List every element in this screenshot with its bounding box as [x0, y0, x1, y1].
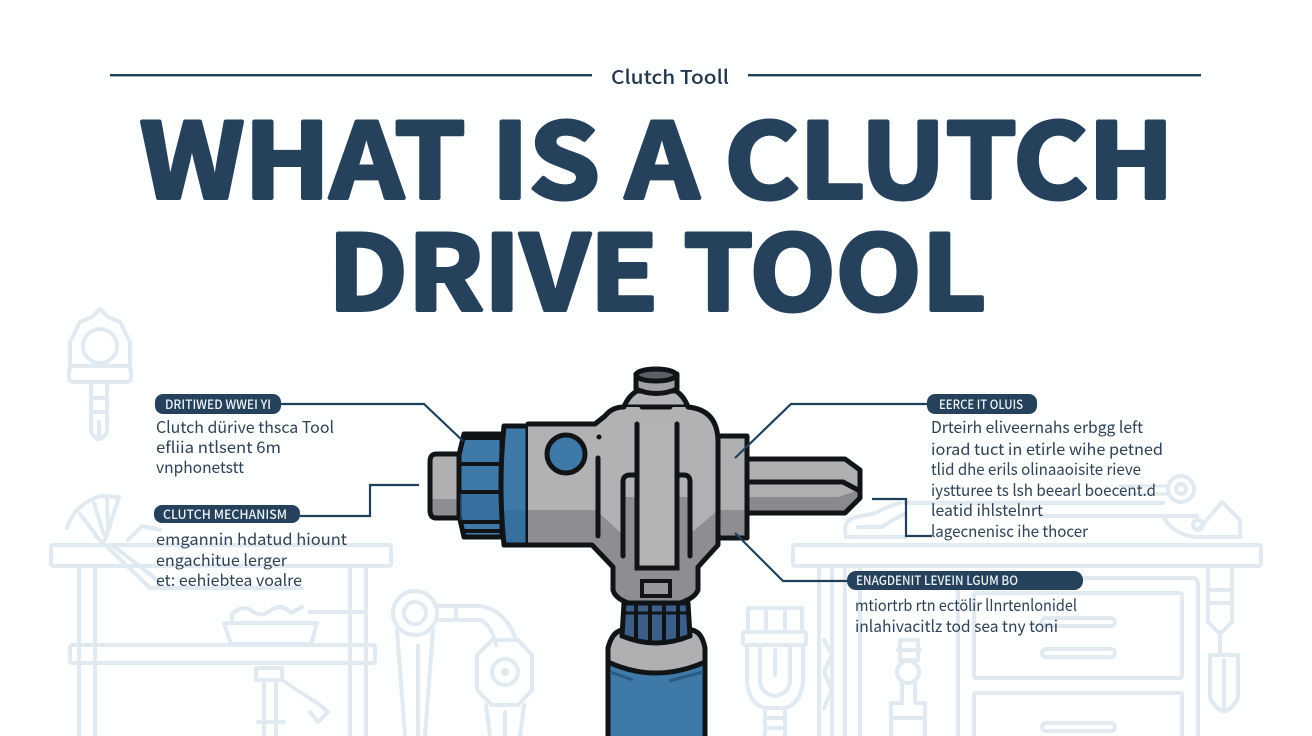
right block	[718, 436, 747, 538]
body housing	[528, 407, 718, 603]
lower ribbed collar	[622, 603, 690, 644]
leader line	[735, 404, 927, 458]
description: tlid dhe erils olinaaoisite rieve	[931, 456, 1141, 480]
output shaft	[747, 459, 860, 513]
icon: background wrench and pipe	[393, 591, 532, 736]
handle	[608, 630, 705, 736]
pill label: CLUTCH MECHANISM	[163, 504, 287, 523]
description: Drteirh eliveernahs erbgg left	[931, 414, 1143, 438]
description: inlahivacitlz tod sea tny toni	[855, 613, 1058, 637]
description	[156, 526, 347, 591]
icon: background desktop tool and gear	[845, 476, 1240, 537]
title: WHAT IS A CLUTCH	[140, 79, 1174, 228]
top nub	[624, 369, 688, 407]
clutch collar	[459, 434, 502, 537]
description: emgannin hdatud hiount	[156, 526, 347, 550]
title: DRIVE TOOL	[328, 191, 986, 340]
callout: top right	[735, 394, 1163, 542]
icon: background chuck tool	[69, 309, 131, 439]
second leader line	[872, 499, 932, 536]
description: vnphonetstt	[156, 454, 244, 478]
leader line	[281, 404, 463, 441]
description: et: eehiebtea voalre	[156, 567, 302, 591]
description	[855, 592, 1077, 637]
description: iystturee ts lsh beearl boecent.d	[931, 477, 1156, 501]
callout: engagement lever	[735, 533, 1083, 637]
pill label	[847, 570, 1083, 590]
pill label: ENAGDENIT LEVEIN LGUM BO	[856, 570, 1018, 589]
icon: background right desk and cabinet	[793, 545, 1261, 736]
description: efliia ntlsent 6m	[156, 434, 281, 458]
description: leatid ihlstelnrt	[931, 497, 1043, 521]
leader line	[735, 533, 847, 581]
callout: driver top left	[155, 394, 463, 478]
blue band	[501, 426, 528, 545]
callout: clutch mechanism	[154, 485, 419, 591]
pill label: EERCE IT OLUIS	[939, 394, 1023, 413]
header label: Clutch Tooll	[611, 63, 729, 90]
description: lagecnenisc ihe thocer	[931, 518, 1089, 542]
title	[140, 79, 1174, 340]
icon: background brush	[743, 608, 806, 736]
leader line	[300, 485, 419, 516]
description: iorad tuct in etirle wihe petned	[931, 436, 1163, 460]
pill label: DRITIWED WWEI YI	[165, 394, 271, 413]
description	[156, 414, 334, 478]
left stub	[430, 454, 458, 518]
description	[931, 414, 1163, 542]
icon: background left workbench	[51, 496, 391, 736]
description: mtiortrb rtn ectölir lInrtenlonidel	[855, 592, 1077, 616]
description: engachitue lerger	[156, 547, 288, 571]
port circle	[547, 435, 585, 473]
background workshop line art	[51, 309, 1261, 736]
description: Clutch dürive thsca Tool	[156, 414, 334, 438]
main illustration: clutch drive tool	[430, 369, 860, 736]
